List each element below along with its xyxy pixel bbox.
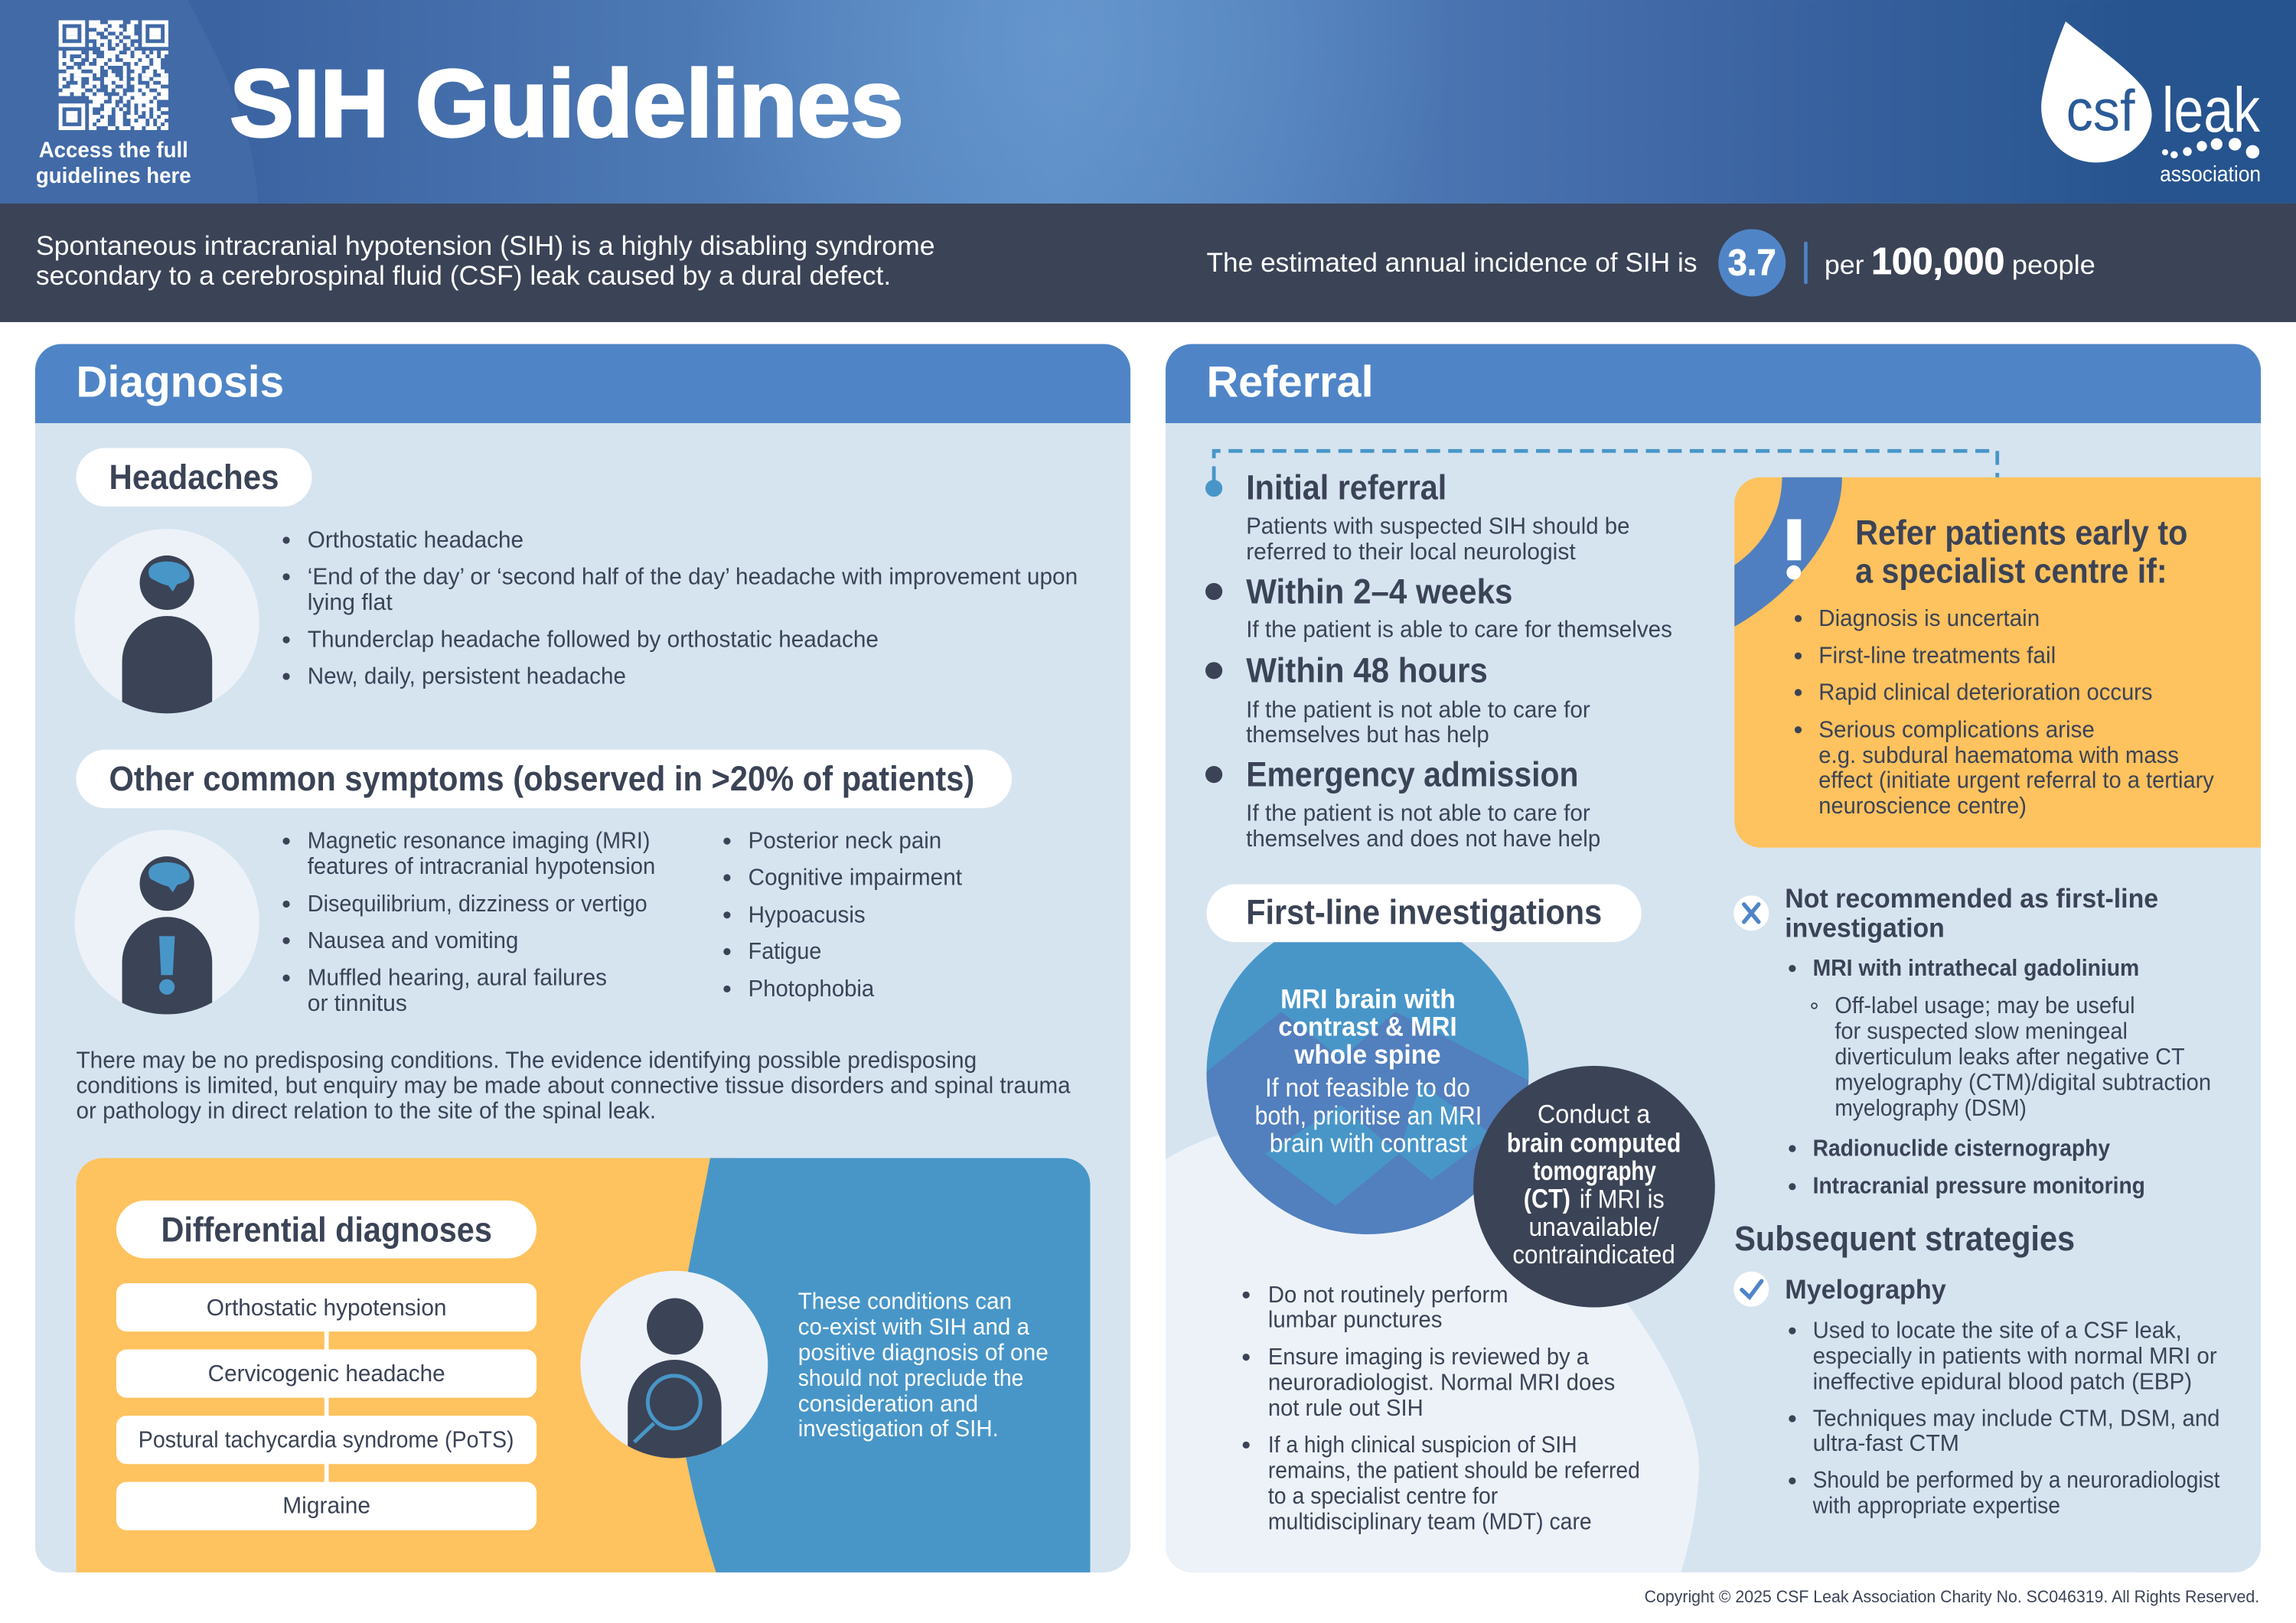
subsequent strategies section: with appropriate expertise <box>1812 1492 2060 1518</box>
not recommended section: Intracranial pressure monitoring <box>1813 1172 2145 1198</box>
subheading: Headaches: Headaches <box>109 458 279 497</box>
subsequent strategies section: Subsequent strategies <box>1734 1219 2075 1258</box>
incidence statistic: The estimated annual incidence of SIH is <box>1207 248 1697 278</box>
other symptoms list, column 2 <box>723 828 962 1002</box>
differential note: should not preclude the <box>798 1365 1023 1391</box>
callout: refer early: Refer patients early to <box>1855 513 2187 552</box>
arrow: dashed referral connector <box>1214 451 1998 481</box>
investigation guidance list: to a specialist centre for <box>1268 1483 1498 1509</box>
headache symptoms list: ‘End of the day’ or ‘second half of the day’ headache with improvement upon <box>308 563 1078 589</box>
investigation guidance list: Ensure imaging is reviewed by a <box>1268 1344 1590 1370</box>
not recommended section: MRI with intrathecal gadolinium <box>1813 955 2139 981</box>
title: SIH Guidelines <box>230 51 903 157</box>
investigation guidance list: multidisciplinary team (MDT) care <box>1268 1508 1592 1534</box>
predisposing conditions paragraph: There may be no predisposing conditions. The evidence identifying possible predisposing <box>76 1048 977 1074</box>
other symptoms list, column 1 <box>282 828 655 1016</box>
heading: Referral: Referral <box>1207 358 1374 407</box>
copyright: Copyright © 2025 CSF Leak Association Charity No. SC046319. All Rights Reserved. <box>1645 1587 2259 1606</box>
not recommended section <box>1733 884 2211 1198</box>
differential note <box>798 1288 1049 1442</box>
other symptoms list, column 1: Magnetic resonance imaging (MRI) <box>308 828 650 854</box>
incidence statistic: per <box>1825 250 1864 280</box>
subsequent strategies section: Should be performed by a neuroradiologist <box>1813 1467 2220 1493</box>
headache symptoms list: Orthostatic headache <box>308 527 523 553</box>
subsequent strategies section: Myelography <box>1785 1275 1946 1305</box>
referral timeline: Within 48 hours <box>1246 651 1488 690</box>
connected diagnosis boxes: Orthostatic hypotension <box>207 1295 447 1321</box>
differential note: These conditions can <box>798 1288 1012 1314</box>
icon: person with magnifying glass <box>580 1271 768 1464</box>
callout: refer early: e.g. subdural haematoma with mass <box>1818 742 2179 768</box>
headache symptoms list <box>282 527 1078 689</box>
not recommended section: for suspected slow meningeal <box>1835 1018 2128 1044</box>
QR code <box>59 22 168 128</box>
panel: Differential diagnoses <box>76 1158 1090 1572</box>
circle: CT alternative: Conduct a <box>1538 1100 1651 1129</box>
logo: csf leak association: csf <box>2066 78 2135 143</box>
subsequent strategies section <box>1733 1219 2220 1518</box>
icon: check mark <box>1733 1272 1769 1307</box>
referral timeline: Initial referral <box>1246 468 1446 507</box>
not recommended section: diverticulum leaks after negative CT <box>1835 1044 2185 1070</box>
subheading: Headaches <box>76 448 312 507</box>
icon: exclamation mark <box>1786 519 1801 579</box>
subsequent strategies section: Used to locate the site of a CSF leak, <box>1813 1318 2182 1344</box>
other symptoms list, column 2: Photophobia <box>748 976 875 1002</box>
QR caption: guidelines here <box>36 164 191 188</box>
connected diagnosis boxes <box>116 1283 536 1530</box>
investigation guidance list: neuroradiologist. Normal MRI does <box>1268 1370 1615 1396</box>
incidence statistic <box>1207 229 2095 296</box>
referral timeline: Within 2–4 weeks <box>1246 572 1512 611</box>
intro text: secondary to a cerebrospinal fluid (CSF) leak caused by a dural defect. <box>36 261 891 291</box>
referral timeline: If the patient is not able to care for <box>1246 800 1590 826</box>
not recommended section: myelography (DSM) <box>1835 1095 2027 1121</box>
other symptoms list, column 2: Cognitive impairment <box>748 865 962 891</box>
predisposing conditions paragraph: conditions is limited, but enquiry may be made about connective tissue disorders and spinal trauma <box>76 1072 1071 1098</box>
headache symptoms list: Thunderclap headache followed by orthostatic headache <box>308 627 879 653</box>
callout: refer early: neuroscience centre) <box>1818 793 2027 819</box>
referral timeline: Emergency admission <box>1246 754 1578 794</box>
other symptoms list, column 1: Disequilibrium, dizziness or vertigo <box>308 891 647 917</box>
differential note: consideration and <box>798 1390 978 1416</box>
other symptoms list, column 1: features of intracranial hypotension <box>308 853 655 879</box>
investigation guidance list: remains, the patient should be referred <box>1268 1457 1640 1483</box>
investigation guidance list: lumbar punctures <box>1268 1306 1443 1332</box>
circle: MRI recommendation: whole spine <box>1293 1040 1441 1070</box>
headache symptoms list: New, daily, persistent headache <box>308 663 626 689</box>
logo: csf leak association: leak <box>2162 76 2261 145</box>
headache symptoms list: lying flat <box>308 589 393 615</box>
referral timeline: themselves and does not have help <box>1246 826 1600 852</box>
callout: refer early: Rapid clinical deterioration occurs <box>1818 680 2152 706</box>
subsequent strategies section: Techniques may include CTM, DSM, and <box>1813 1406 2220 1432</box>
referral timeline: referred to their local neurologist <box>1246 539 1576 565</box>
other symptoms list, column 1: Nausea and vomiting <box>308 927 518 953</box>
callout: refer early: effect (initiate urgent referral to a tertiary <box>1818 767 2215 793</box>
not recommended section: investigation <box>1785 914 1945 943</box>
QR caption: Access the full <box>39 139 188 163</box>
other symptoms list, column 2: Fatigue <box>748 938 821 964</box>
referral timeline: If the patient is able to care for themselves <box>1246 616 1672 642</box>
icon: cross <box>1733 895 1769 930</box>
other symptoms list, column 2: Hypoacusis <box>748 901 866 927</box>
callout: refer early <box>1734 477 2261 848</box>
circle: CT alternative: unavailable/ <box>1528 1213 1659 1242</box>
investigation guidance list <box>1243 1282 1640 1534</box>
panel: Referral <box>1166 344 2261 1572</box>
callout: refer early: a specialist centre if: <box>1855 551 2167 590</box>
connected diagnosis boxes: Postural tachycardia syndrome (PoTS) <box>139 1426 514 1452</box>
heading: Diagnosis: Diagnosis <box>76 358 284 407</box>
subheading: First-line investigations: First-line investigations <box>1246 892 1602 931</box>
intro bar <box>0 204 2296 322</box>
subheading: Other common symptoms: Other common symptoms (observed in >20% of patients) <box>109 759 974 798</box>
circle: CT alternative: if MRI is <box>1580 1185 1665 1214</box>
logo: csf leak association: association <box>2160 162 2261 187</box>
investigation guidance list: not rule out SIH <box>1268 1395 1424 1421</box>
circle: MRI recommendation: MRI brain with <box>1280 984 1456 1014</box>
not recommended section: Not recommended as first-line <box>1785 884 2158 914</box>
referral timeline: themselves but has help <box>1246 722 1489 748</box>
subheading: Other common symptoms <box>76 750 1012 808</box>
not recommended section: Off-label usage; may be useful <box>1835 992 2135 1018</box>
subheading: Differential diagnoses <box>116 1201 536 1258</box>
circle: MRI recommendation: contrast & MRI <box>1278 1012 1457 1042</box>
circle: CT alternative: (CT) <box>1524 1184 1570 1214</box>
referral timeline <box>1205 468 1672 852</box>
predisposing conditions paragraph: or pathology in direct relation to the site of the spinal leak. <box>76 1098 656 1124</box>
referral timeline: Patients with suspected SIH should be <box>1246 513 1629 539</box>
circle: CT alternative: tomography <box>1533 1156 1656 1186</box>
incidence statistic: 3.7 <box>1728 243 1776 284</box>
circle: CT alternative: contraindicated <box>1512 1240 1675 1269</box>
investigation guidance list: If a high clinical suspicion of SIH <box>1268 1432 1577 1458</box>
icon: person with warning <box>75 829 259 1018</box>
header band <box>0 0 2296 204</box>
differential note: positive diagnosis of one <box>798 1339 1049 1365</box>
intro text: Spontaneous intracranial hypotension (SIH) is a highly disabling syndrome <box>36 231 935 261</box>
intro text <box>36 231 935 291</box>
incidence statistic: 100,000 <box>1871 241 2004 282</box>
QR caption <box>36 139 191 188</box>
not recommended section: myelography (CTM)/digital subtraction <box>1835 1069 2211 1095</box>
subheading: Differential diagnoses: Differential diagnoses <box>161 1210 492 1249</box>
not recommended section: Radionuclide cisternography <box>1813 1136 2110 1162</box>
callout: refer early: Diagnosis is uncertain <box>1818 605 2040 631</box>
circle: CT alternative <box>1473 1066 1715 1308</box>
differential note: investigation of SIH. <box>798 1416 999 1442</box>
predisposing conditions paragraph <box>76 1048 1071 1124</box>
subheading: First-line investigations <box>1207 885 1642 942</box>
differential note: co-exist with SIH and a <box>798 1314 1030 1340</box>
connected diagnosis boxes: Cervicogenic headache <box>208 1361 445 1387</box>
circle: MRI recommendation: brain with contrast <box>1270 1129 1467 1159</box>
other symptoms list, column 1: Muffled hearing, aural failures <box>308 965 607 991</box>
callout: refer early: Serious complications arise <box>1818 716 2095 742</box>
icon: person with headache <box>75 529 259 718</box>
panel: Diagnosis <box>35 344 1130 1572</box>
subsequent strategies section: ineffective epidural blood patch (EBP) <box>1813 1369 2192 1395</box>
circle: MRI recommendation <box>1206 942 1529 1234</box>
callout: refer early: First-line treatments fail <box>1818 643 2056 669</box>
subsequent strategies section: ultra-fast CTM <box>1813 1430 1959 1456</box>
circle: MRI recommendation: If not feasible to do <box>1265 1074 1470 1103</box>
circle: CT alternative: brain computed <box>1507 1129 1681 1159</box>
incidence statistic: people <box>2012 250 2095 280</box>
other symptoms list, column 1: or tinnitus <box>308 990 407 1016</box>
connected diagnosis boxes: Migraine <box>282 1492 370 1518</box>
referral timeline: If the patient is not able to care for <box>1246 697 1590 723</box>
logo: csf leak association <box>2041 21 2261 187</box>
investigation guidance list: Do not routinely perform <box>1268 1282 1508 1308</box>
other symptoms list, column 2: Posterior neck pain <box>748 828 941 854</box>
circle: MRI recommendation: both, prioritise an MRI <box>1255 1101 1482 1130</box>
subsequent strategies section: especially in patients with normal MRI or <box>1813 1343 2217 1369</box>
